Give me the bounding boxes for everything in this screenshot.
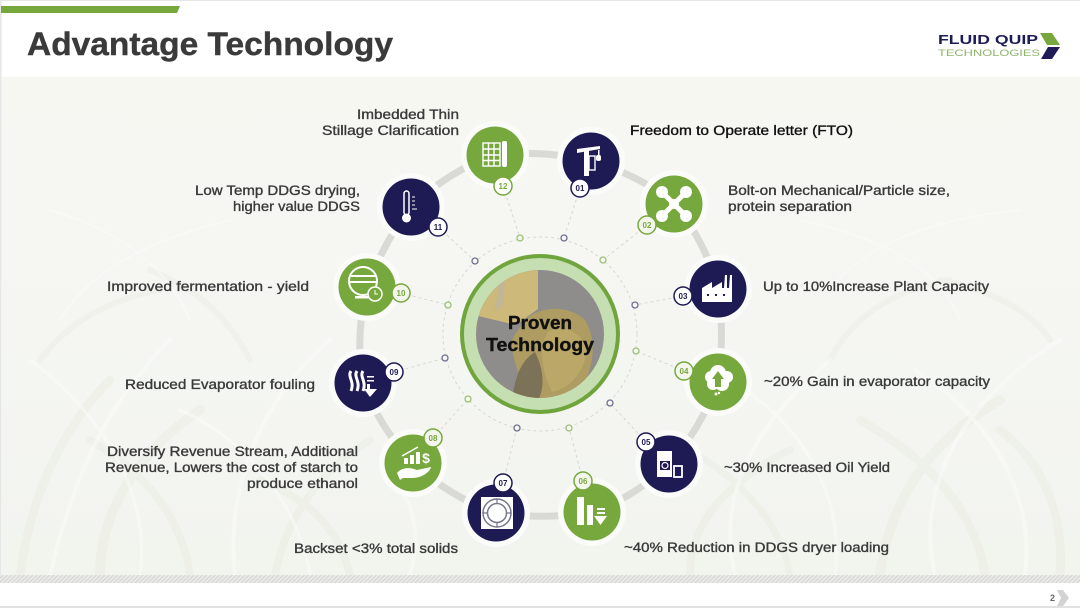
title: Advantage Technology (27, 26, 393, 62)
node 10: fermenter and clock icon: 10 (397, 289, 406, 298)
node 04: cloud arrow icon, evaporator capacity (675, 348, 752, 416)
page number: 2 (1050, 593, 1055, 603)
node 12: thin stillage clarification (461, 121, 529, 195)
node 04: cloud arrow icon, evaporator capacity: 04 (680, 367, 689, 376)
node 09: steam and down arrow icon, evaporator fouling (329, 349, 403, 417)
label 06: dryer loading: ~40% Reduction in DDGS dryer loading (624, 540, 889, 555)
node 06: bars and down arrow icon, dryer loading: 06 (579, 477, 588, 486)
center hub: Proven Technology: Technology (486, 335, 594, 355)
node 03: factory icon, plant capacity: 03 (679, 292, 688, 301)
footer band (0, 575, 1080, 608)
node 07: centrifuge square icon, backset solids: 07 (499, 479, 508, 488)
label 02: Bolt-on: protein separation (728, 199, 852, 214)
label 11: low temp drying (195, 183, 360, 214)
label 08: diversify revenue: Diversify Revenue Stream, Additional (107, 444, 358, 459)
label 05: oil yield: ~30% Increased Oil Yield (724, 460, 890, 475)
label 01: Freedom to operate: Freedom to Operate letter (FTO) (630, 123, 853, 138)
logo: Fluid Quip Technologies (938, 32, 1060, 59)
node 07: centrifuge square icon, backset solids (462, 474, 530, 547)
node 03: factory icon, plant capacity (674, 255, 752, 323)
node 05: oil tank icon, oil yield: 05 (642, 438, 651, 447)
label 11: low temp drying: higher value DDGS (233, 199, 360, 214)
label 02: Bolt-on: Bolt-on Mechanical/Particle size, (728, 183, 950, 198)
label 12: Imbedded thin stillage clarification: Stillage Clarification (322, 123, 459, 138)
node 01: crane icon, freedom to operate (557, 127, 625, 197)
inner ring dots (442, 235, 639, 431)
node 11: thermometer icon, low temp drying: 11 (434, 223, 443, 232)
node 05: oil tank icon, oil yield (635, 430, 703, 498)
node 09: steam and down arrow icon, evaporator fouling: 09 (390, 368, 399, 377)
node 02: particle size icon (638, 170, 708, 238)
label 08: diversify revenue: Revenue, Lowers the cost of starch to (105, 460, 358, 475)
label 08: diversify revenue: produce ethanol (247, 476, 358, 491)
label 12: Imbedded thin stillage clarification (322, 107, 459, 138)
node 08: hand and revenue icon (379, 429, 447, 497)
label 08: diversify revenue (105, 444, 358, 491)
node 06: bars and down arrow icon, dryer loading (558, 472, 626, 546)
green accent bar (1, 6, 180, 13)
icon: footer chevron (1057, 590, 1069, 606)
node 01: crane icon, freedom to operate: 01 (576, 184, 585, 193)
node 08: hand and revenue icon: 08 (429, 434, 438, 443)
label 11: low temp drying: Low Temp DDGS drying, (195, 183, 360, 198)
node 12: thin stillage clarification: 12 (499, 182, 508, 191)
label 12: Imbedded thin stillage clarification: Imbedded Thin (357, 107, 459, 122)
node 11: thermometer icon, low temp drying (377, 173, 447, 241)
label 10: fermentation: Improved fermentation - yield (107, 279, 309, 294)
label 07: backset: Backset <3% total solids (294, 541, 458, 556)
label 03: plant capacity: Up to 10%Increase Plant Capacity (763, 279, 989, 294)
logo: Fluid Quip Technologies: FLUID QUIP (938, 32, 1038, 47)
node 10: fermenter and clock icon (333, 253, 410, 321)
center hub: Proven Technology: Proven (508, 313, 572, 333)
logo: Fluid Quip Technologies: TECHNOLOGIES (938, 48, 1040, 58)
connecting ring between the twelve nodes (360, 153, 722, 516)
dashed inner ring and spokes (394, 186, 684, 483)
node 08: hand and revenue icon: $ (422, 450, 430, 466)
center hub: Proven Technology (462, 256, 618, 412)
label 02: Bolt-on (728, 183, 950, 214)
label 09: evaporator fouling: Reduced Evaporator fouling (125, 377, 315, 392)
node 02: particle size icon: 02 (643, 221, 652, 230)
label 04: evaporator capacity: ~20% Gain in evaporator capacity (764, 374, 990, 389)
